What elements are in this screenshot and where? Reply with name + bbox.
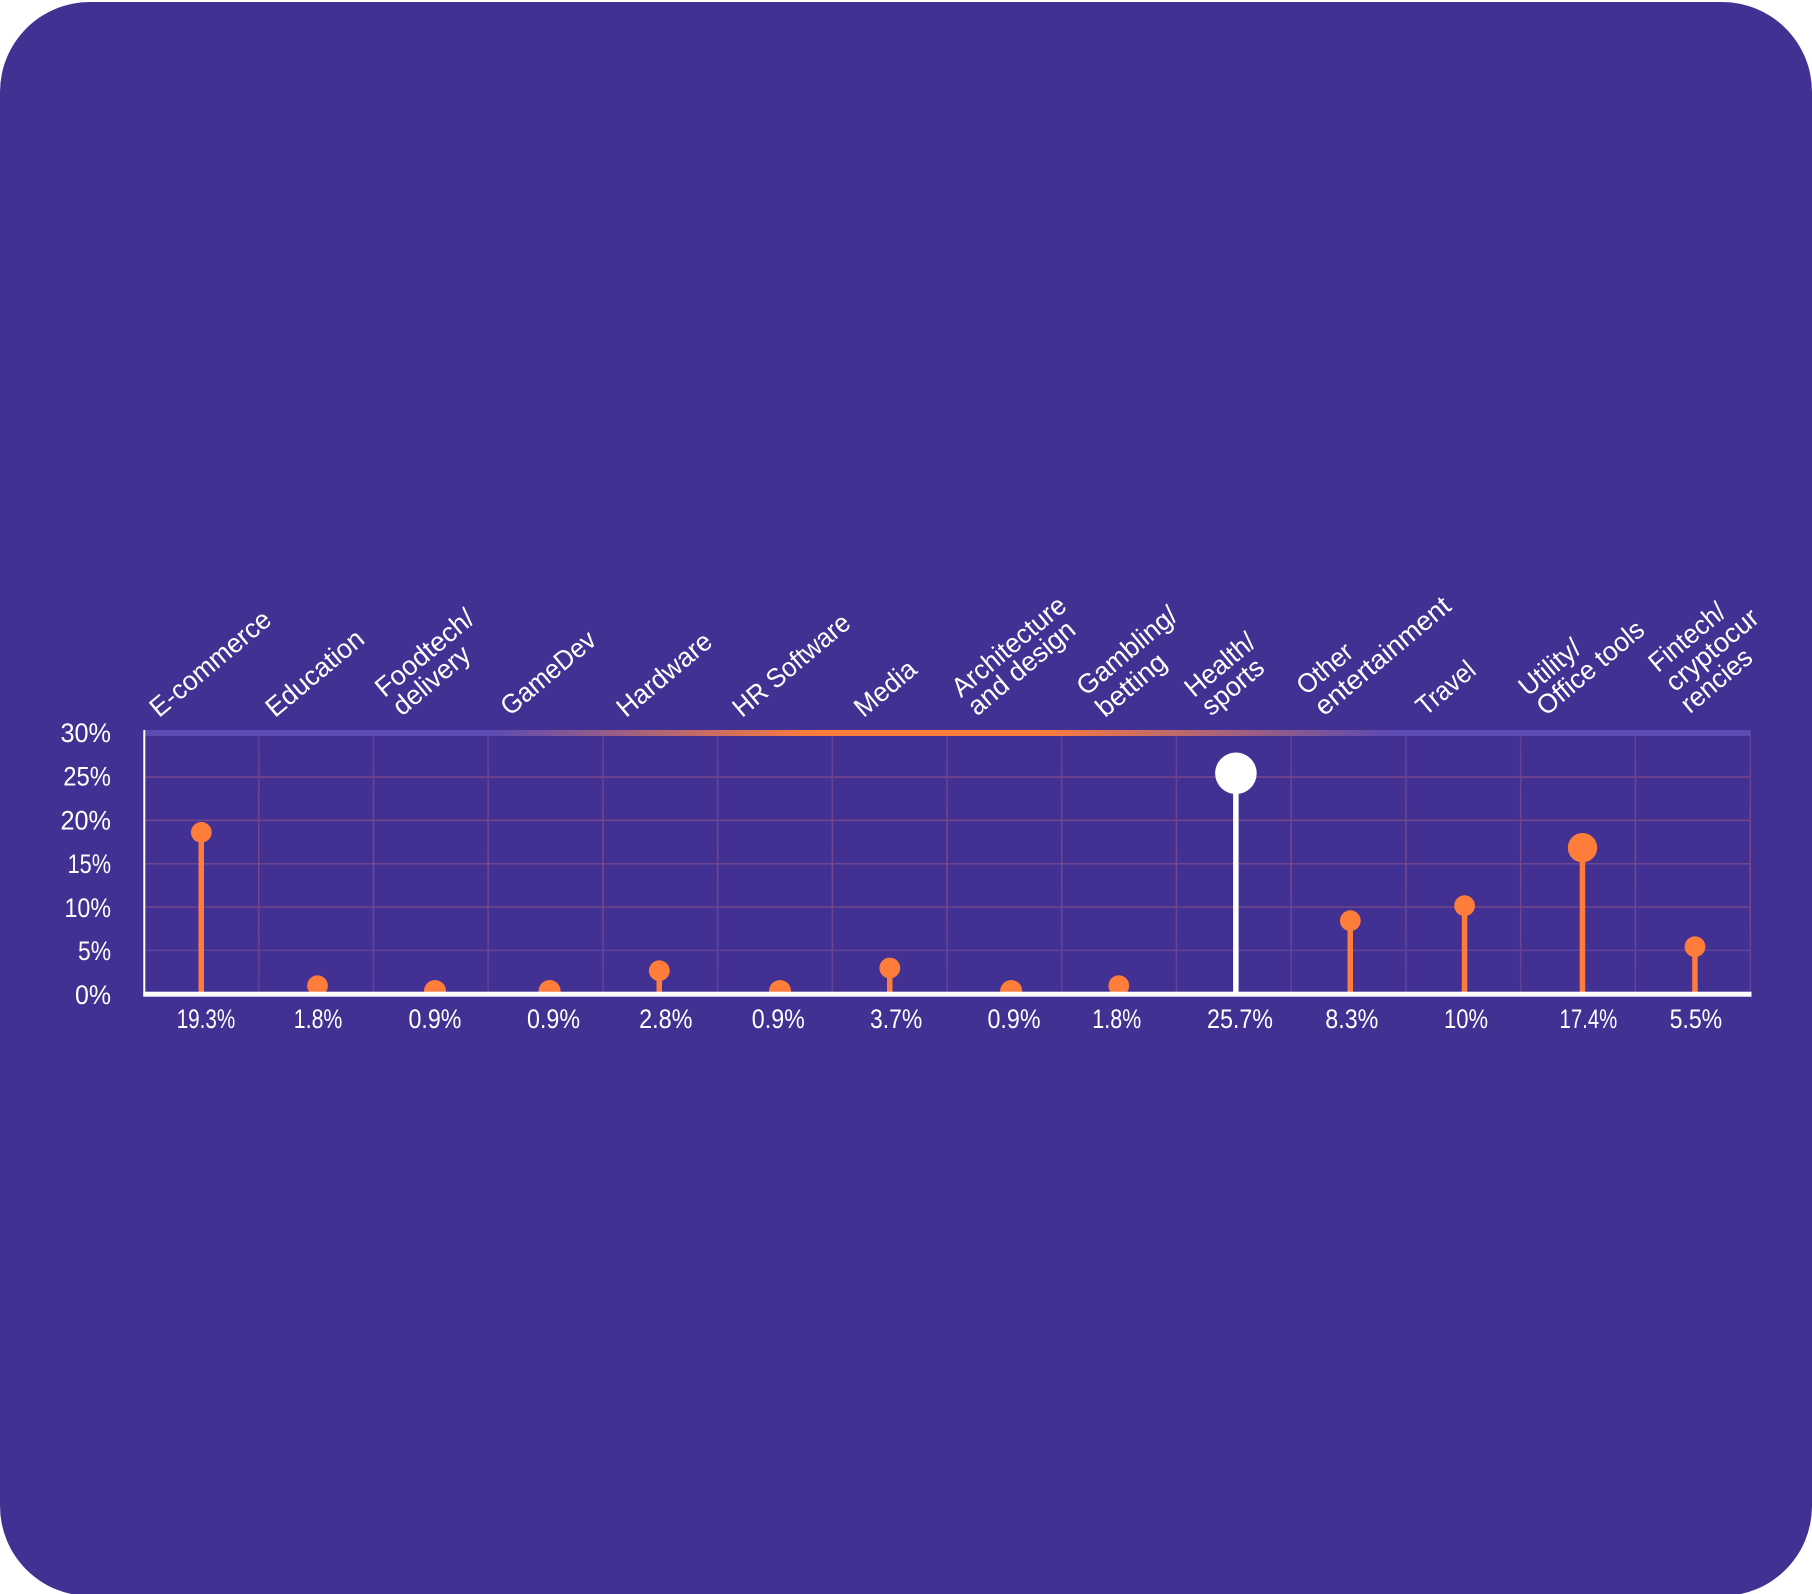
value labels: 17.4% [1560, 1004, 1617, 1034]
lollipop: E-commerce 19.3% [191, 822, 212, 992]
category labels: entertainment [1309, 590, 1457, 721]
y axis labels: 5% [78, 936, 111, 966]
lollipop: Health/sports 25.7% highlighted [1215, 752, 1257, 992]
value labels: 3.7% [870, 1004, 922, 1034]
value labels: 0.9% [752, 1004, 805, 1034]
y axis labels: 30% [60, 718, 111, 748]
lollipop: Hardware 2.8% [649, 960, 670, 992]
y axis labels: 20% [60, 806, 111, 836]
y axis labels: 25% [63, 762, 111, 792]
category labels: and design [962, 614, 1081, 721]
value labels: 19.3% [177, 1004, 235, 1034]
value labels: 2.8% [639, 1004, 692, 1034]
category labels: delivery [387, 639, 477, 721]
lollipop: Media 3.7% [879, 958, 900, 992]
category labels: cryptocur [1660, 602, 1765, 697]
value labels: 0.9% [988, 1004, 1040, 1034]
lollipop: HR Software 0.9% [769, 980, 791, 992]
category labels: Foodtech/ [369, 602, 481, 703]
category labels: Other [1291, 636, 1359, 701]
category labels: Utility/ [1513, 632, 1587, 702]
top gradient band [144, 730, 1751, 736]
category labels [144, 590, 1765, 723]
lollipop: Fintech/cryptocurrencies 5.5% [1685, 936, 1705, 992]
value labels: 10% [1444, 1004, 1488, 1034]
category labels: sports [1196, 652, 1270, 721]
y axis labels [60, 718, 111, 1010]
value labels: 1.8% [294, 1004, 342, 1034]
lollipop: Education 1.8% [307, 975, 328, 992]
value labels [177, 1004, 1722, 1034]
value labels: 0.9% [408, 1004, 461, 1034]
y axis labels: 10% [64, 893, 111, 923]
value labels: 5.5% [1670, 1004, 1722, 1034]
category labels: HR Software [727, 607, 856, 723]
lollipop: Utility/Office tools 17.4% [1568, 833, 1597, 992]
category labels: Education [260, 623, 370, 723]
category labels: Hardware [611, 626, 718, 723]
category labels: GameDev [495, 624, 602, 721]
value labels: 1.8% [1092, 1004, 1141, 1034]
chart: lollipop chart [60, 590, 1765, 1034]
lollipop: Other entertainment 8.3% [1340, 910, 1361, 992]
category labels: Health/ [1179, 626, 1262, 703]
lollipop: Travel 10% [1454, 895, 1475, 992]
value labels: 8.3% [1325, 1004, 1378, 1034]
category labels: Office tools [1531, 614, 1650, 721]
category labels: Gambling/ [1071, 600, 1184, 701]
category labels: Architecture [946, 590, 1072, 703]
category labels: Media [848, 653, 923, 723]
x axis line [143, 992, 1751, 997]
lollipop: Gambling/betting 1.8% [1108, 975, 1130, 992]
lollipop: GameDev 0.9% [538, 980, 561, 992]
lollipop: Architecture and design 0.9% [1000, 980, 1022, 992]
category labels: E-commerce [144, 604, 277, 723]
category labels: Fintech/ [1643, 596, 1732, 678]
y axis labels: 0% [75, 980, 111, 1010]
category labels: betting [1090, 647, 1172, 723]
y axis line [143, 730, 145, 996]
value labels: 25.7% [1207, 1004, 1273, 1034]
category labels: Travel [1410, 655, 1481, 721]
grid lines [145, 730, 1751, 992]
lollipop: Foodtech/delivery 0.9% [424, 980, 446, 992]
category labels: rencies [1675, 642, 1758, 719]
y axis labels: 15% [68, 849, 111, 879]
value labels: 0.9% [527, 1004, 580, 1034]
